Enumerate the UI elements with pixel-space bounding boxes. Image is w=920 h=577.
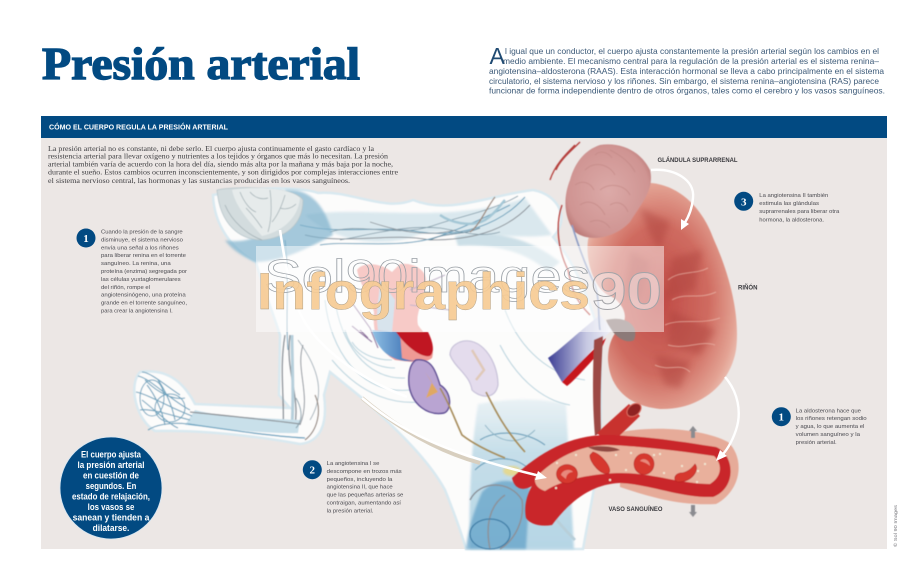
image credit: © Sol 90 Images: [893, 505, 898, 547]
badge 2: 2: [310, 465, 316, 477]
drop cap: A: [490, 43, 506, 69]
intro text block: l igual que un conductor, el cuerpo ajusta constantemente la presión arterial según los cambios en el: [505, 46, 879, 56]
step 1 text: angiotensinógeno, una proteína: [101, 293, 187, 299]
renal vessels: [548, 315, 635, 436]
step 2 text: pequeños, incluyendo la: [327, 477, 393, 483]
step 3 text: [759, 193, 840, 223]
intro text block: circulatorio, el sistema nervioso y los riñones. Sin embargo, el sistema renina–angiotensina (RAS) parece: [489, 76, 879, 86]
white arrow: brain to kidney: [280, 230, 407, 397]
step 4 text: [796, 408, 867, 446]
step 4 text: y agua, lo que aumenta el: [796, 424, 864, 430]
adrenal gland: [550, 142, 651, 330]
watermark: [256, 246, 664, 332]
intro paragraph in panel: arterial también varía de acuerdo con la hora del día, siendo más alta por la mañana y más baja por la noche,: [48, 160, 393, 168]
step 1 text: proteína (enzima) segregada por: [101, 269, 187, 275]
arrow: kidney to vessel: [362, 398, 547, 480]
step 4 text: los riñones retengan sodio: [796, 416, 867, 422]
step 3 text: suprarrenales para liberar otra: [759, 209, 840, 215]
cell hollows: [561, 459, 650, 479]
step 2 text: contraigan, aumentando así: [327, 500, 401, 506]
step 4: [772, 407, 867, 446]
arm and hand vessels: [136, 372, 318, 440]
shoulder tint: [305, 198, 552, 242]
arrow: adrenal curved: [651, 170, 693, 230]
step 2 text: La angiotensina I se: [327, 461, 379, 467]
blood vessel: [512, 401, 739, 526]
callout circle: en cuestión de: [83, 470, 139, 480]
badge 3: 3: [741, 196, 747, 208]
nerves and vessels: upper body: [282, 196, 530, 430]
branch artery: [597, 401, 644, 445]
step 3 text: estimula las glándulas: [759, 201, 819, 207]
step 1 text: [101, 230, 187, 314]
plasma particles: [555, 452, 706, 489]
intro paragraph in panel: [48, 144, 399, 185]
purple kidney: [409, 360, 450, 413]
heart blue ventricle: [372, 330, 420, 361]
intro text block: angiotensina–aldosterona (RAAS). Esta interacción hormonal se lleva a cabo principalmente en el sistema: [489, 66, 884, 76]
kidney pyramids: [625, 208, 715, 388]
step 1 text: sanguíneo. La renina, una: [101, 261, 172, 267]
step 3 text: hormona, la aldosterona.: [759, 217, 824, 223]
right shoulder tint: [455, 233, 560, 272]
step 1 text: las células yuxtaglomerulares: [101, 277, 181, 283]
intro paragraph in panel: La presión arterial no es constante, ni debe serlo. El cuerpo ajusta continuamente el gasto cardíaco y la: [48, 144, 375, 153]
heart red ventricle: [396, 332, 433, 356]
panel background: [41, 138, 887, 549]
outer sheath: [620, 429, 739, 504]
label: adrenal gland: GLÁNDULA SUPRARRENAL: [658, 155, 738, 164]
icon: small kidneys: [409, 341, 525, 458]
pale kidney: [450, 341, 498, 396]
step 2: [303, 460, 403, 514]
grey arrow down: [689, 505, 697, 517]
callout circle: estado de relajación,: [72, 490, 150, 502]
neck tissue: [225, 190, 333, 262]
blood cells: [556, 452, 696, 484]
callout circle: segundos. En: [86, 480, 137, 491]
step 3 text: La angiotensina II también: [759, 193, 828, 199]
step 2 text: [327, 461, 403, 514]
large kidney: [587, 183, 737, 409]
step 4 text: presión arterial.: [796, 440, 837, 446]
intro paragraph in panel: el sistema nervioso central, las hormonas y las sustancias producidas en los vasos sanguíneos.: [48, 176, 350, 185]
intro text block: [489, 43, 885, 96]
step 1 text: del riñón, rompe el: [101, 285, 150, 291]
lumen: [535, 445, 720, 491]
callout circle: [60, 437, 162, 539]
arrow: kidney to vessel curved: [716, 377, 739, 461]
yellow nerve spot: [503, 466, 521, 476]
step 3: [734, 192, 840, 223]
body silhouette: [134, 188, 601, 549]
thorax rib cage: [325, 300, 585, 405]
step 1 text: para liberar renina en el torrente: [101, 253, 186, 259]
step 1 text: envía una señal a los riñones: [101, 245, 179, 251]
icon: small heart: [350, 264, 450, 362]
callout circle: dilatarse.: [93, 522, 129, 533]
step 2 text: que las pequeñas arterias se: [327, 493, 403, 499]
callout circle: sanean y tienden a: [73, 512, 150, 523]
brain: [217, 188, 303, 240]
watermark outline text: Sol90images: [264, 250, 590, 302]
watermark orange text: Infographics: [257, 263, 590, 321]
step 4 text: volumen sanguíneo y la: [796, 432, 861, 438]
step 1 text: grande en el torrente sanguíneo,: [101, 301, 187, 307]
badge 4: 1: [779, 412, 784, 424]
pelvis vessels: [470, 425, 575, 549]
step 4 text: La aldosterona hace que: [796, 408, 861, 414]
step 2 text: angiotensina II, que hace: [327, 485, 393, 491]
kidney pale veins: [655, 268, 720, 372]
step 1 left: [76, 228, 187, 314]
watermark outlined number: 90: [591, 263, 662, 321]
callout circle: la presión arterial: [78, 459, 144, 470]
intro text block: funcionar de forma independiente dentro de otros órganos, tales como el cerebro y los vasos sanguíneos.: [489, 86, 885, 96]
badge 1: 1: [83, 233, 89, 245]
step 1 text: disminuye, el sistema nervioso: [101, 237, 183, 243]
step 1 text: para crear la angiotensina I.: [101, 308, 173, 314]
intro paragraph in panel: durante el sueño. Estos cambios ocurren inconscientemente, y son dirigidos por complejas interacciones entre: [48, 168, 399, 176]
step 2 text: la presión arterial.: [327, 508, 374, 514]
callout circle: los vasos se: [88, 501, 134, 512]
pelvis tint: [469, 400, 574, 549]
label: kidney: RIÑÓN: [738, 282, 758, 292]
header text: CÓMO EL CUERPO REGULA LA PRESIÓN ARTERIAL: [49, 122, 228, 132]
vessel wall: [512, 435, 731, 526]
title: Presión arterial: [42, 38, 360, 89]
header bar: [41, 116, 887, 138]
adrenal vessels: [550, 142, 590, 315]
intro text block: medio ambiente. El mecanismo central para la regulación de la presión arterial es el sistema renina–: [503, 56, 879, 66]
plaque: [588, 446, 620, 452]
step 1 text: Cuando la presión de la sangre: [101, 230, 183, 236]
label: blood vessel: VASO SANGUÍNEO: [608, 504, 663, 513]
pelvis dark zone: [466, 481, 530, 549]
intro paragraph in panel: resistencia arterial para llevar oxígeno y nutrientes a los tejidos y órganos que más lo necesitan. La presión: [48, 152, 388, 161]
grey arrow up: [689, 426, 697, 438]
step 2 text: descompone en trozos más: [327, 469, 402, 475]
callout circle: El cuerpo ajusta: [81, 448, 142, 460]
